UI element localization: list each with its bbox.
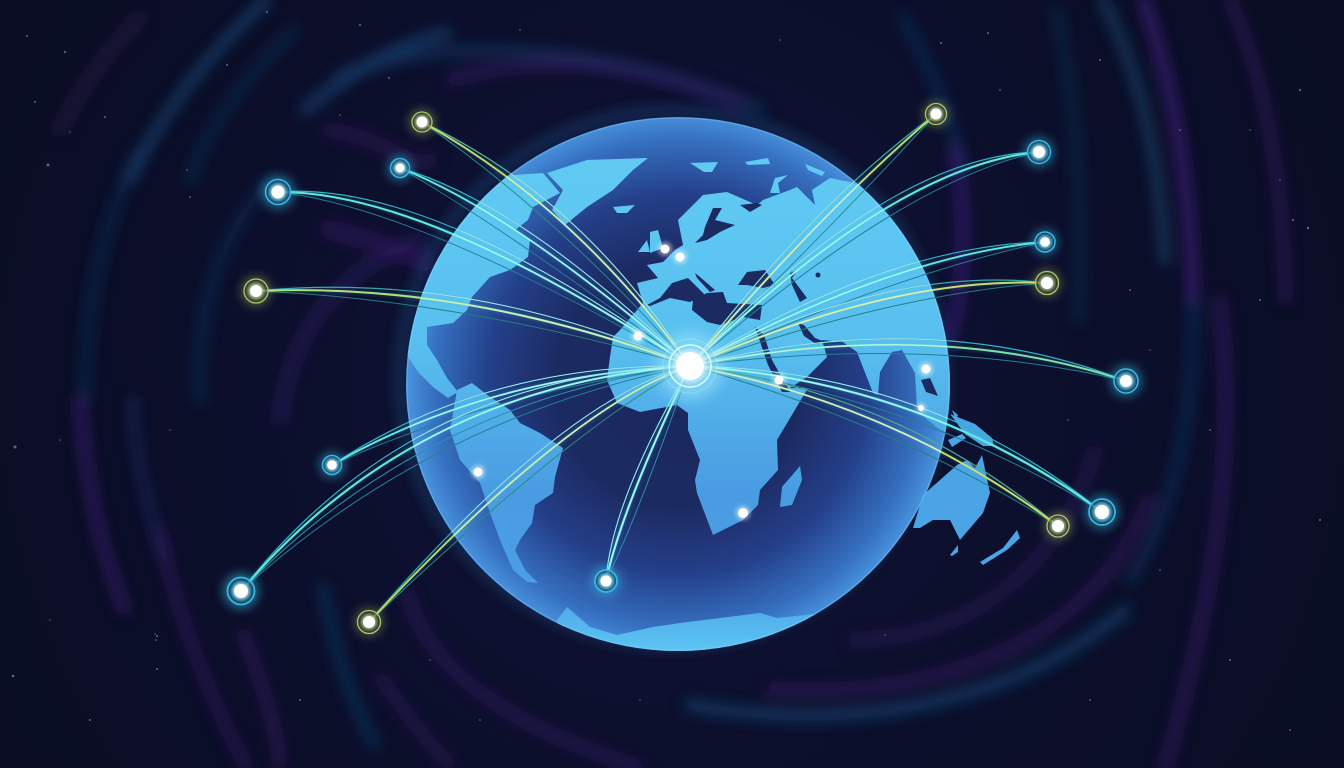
city dots on the globe bbox=[471, 242, 933, 520]
node: north-east yellow bbox=[923, 101, 949, 127]
persian gulf bbox=[798, 323, 825, 344]
tasmania bbox=[950, 545, 958, 556]
node: east upper cyan bbox=[1032, 229, 1058, 255]
node: north-west cyan small bbox=[387, 155, 413, 181]
aral sea bbox=[816, 272, 820, 278]
line: north-east cyan bbox=[690, 152, 1039, 366]
inland seas on the globe bbox=[647, 203, 938, 396]
antarctica bbox=[557, 607, 815, 651]
endpoint nodes bbox=[223, 101, 1142, 636]
africa and eurasia bbox=[607, 178, 960, 535]
node: south-east cyan bbox=[1085, 495, 1119, 529]
node: east cyan bbox=[1110, 365, 1142, 397]
madagascar bbox=[780, 466, 802, 507]
south america bbox=[450, 383, 563, 583]
new zealand bbox=[980, 530, 1020, 565]
line: west yellow bbox=[256, 287, 690, 366]
line: north-west cyan small bbox=[400, 168, 690, 366]
svalbard and arctic islands bbox=[690, 158, 825, 193]
caspian sea bbox=[790, 270, 807, 302]
greenland bbox=[547, 158, 648, 225]
australia bbox=[913, 455, 990, 540]
uk and ireland bbox=[638, 230, 663, 253]
globe ocean sphere bbox=[406, 117, 950, 651]
connection line glow bbox=[241, 114, 1126, 622]
eastern mediterranean bbox=[692, 292, 762, 325]
node: east yellow bbox=[1033, 269, 1061, 297]
line: north-east yellow bbox=[690, 114, 936, 366]
indonesia bbox=[948, 410, 994, 447]
node: south-west cyan large bbox=[223, 573, 259, 609]
line: south-west cyan large bbox=[241, 366, 690, 591]
continents on the globe bbox=[405, 158, 960, 660]
line: east cyan bbox=[690, 339, 1126, 381]
node: north-west yellow bbox=[409, 109, 435, 135]
node: south-east yellow bbox=[1044, 512, 1072, 540]
black sea bbox=[738, 270, 775, 288]
globe rim highlight bbox=[407, 118, 949, 650]
line: south-west cyan small bbox=[332, 366, 690, 465]
node: south-west cyan small bbox=[319, 452, 345, 478]
line: south cyan bbox=[606, 366, 690, 581]
line: north-west yellow bbox=[422, 122, 690, 366]
line: south-east yellow bbox=[690, 366, 1058, 526]
globe outer glow bbox=[400, 111, 944, 645]
iceland bbox=[613, 205, 635, 213]
bright line sections over the globe bbox=[408, 173, 948, 574]
western mediterranean bbox=[647, 278, 705, 306]
north america bbox=[405, 173, 560, 398]
line: south-west yellow bbox=[369, 366, 690, 622]
line: east upper cyan bbox=[690, 242, 1045, 366]
white sea bbox=[740, 203, 762, 212]
central hub node bbox=[656, 332, 724, 400]
line: south-east cyan bbox=[690, 366, 1102, 512]
node: north-east cyan bbox=[1024, 137, 1054, 167]
gulf of thailand bbox=[921, 378, 938, 396]
globe bbox=[405, 117, 1020, 660]
node: north-west cyan large bbox=[261, 175, 295, 209]
adriatic sea bbox=[695, 273, 715, 292]
connection lines bbox=[241, 114, 1126, 622]
line: east yellow bbox=[690, 280, 1047, 366]
red sea bbox=[755, 327, 790, 392]
baltic sea bbox=[695, 208, 735, 243]
node: south cyan bbox=[591, 566, 621, 596]
node: south-west yellow bbox=[355, 608, 383, 636]
node: west yellow bbox=[241, 276, 271, 306]
line: north-west cyan large bbox=[278, 191, 690, 366]
australasia islands beyond the globe rim bbox=[913, 410, 1020, 565]
